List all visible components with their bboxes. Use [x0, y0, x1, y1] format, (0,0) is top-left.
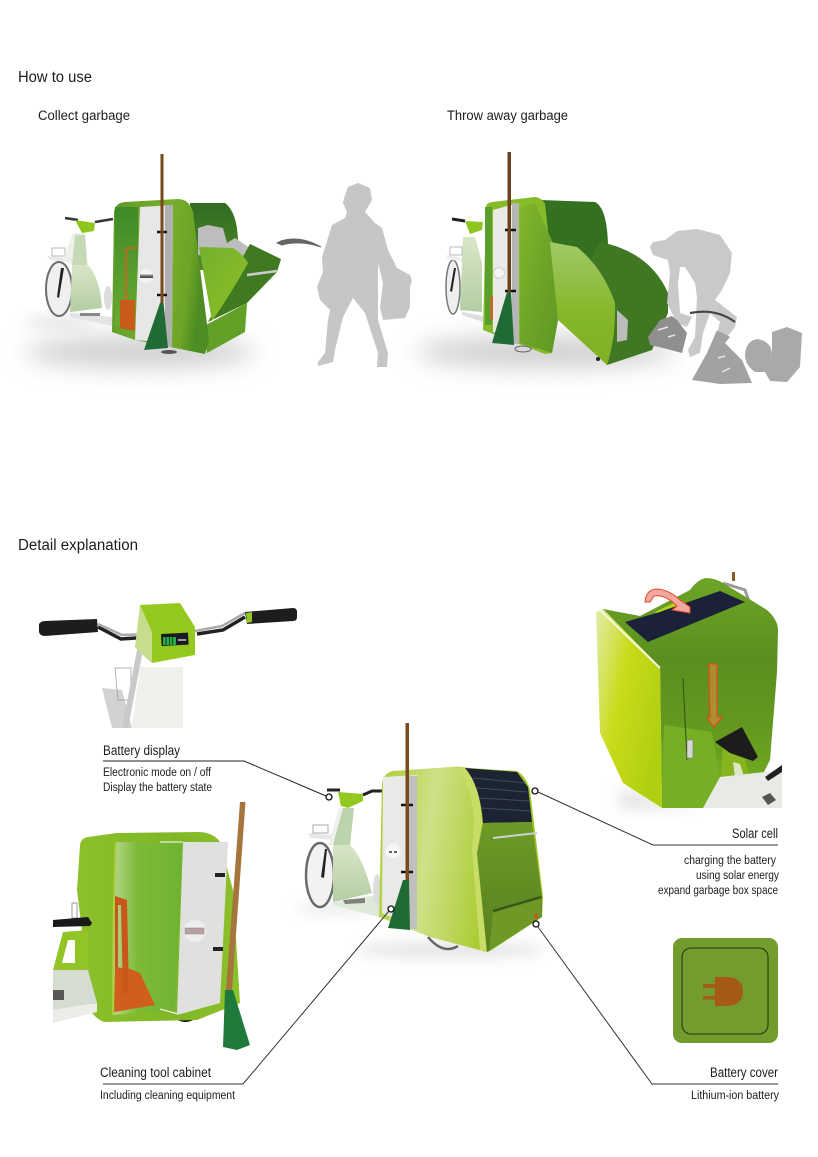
- icon: battery cover plug: [673, 938, 778, 1043]
- detail image: handlebar and battery display: [39, 603, 297, 728]
- callout: battery cover: Battery cover: [710, 1065, 778, 1080]
- heading: how to use: How to use: [18, 69, 92, 86]
- heading: detail explanation: Detail explanation: [18, 537, 138, 554]
- callout: battery display: Display the battery state: [103, 782, 212, 794]
- heading: throw away garbage: Throw away garbage: [447, 108, 568, 123]
- callout: battery display: [103, 743, 332, 800]
- callout: solar cell: Solar cell: [732, 826, 778, 841]
- callout: solar cell: charging the battery: [684, 855, 776, 867]
- heading: collect garbage: Collect garbage: [38, 108, 130, 123]
- callout: cleaning tool cabinet: Cleaning tool cabinet: [100, 1065, 211, 1080]
- callout: battery cover: Lithium-ion battery: [691, 1090, 779, 1102]
- callout: cleaning tool cabinet: [100, 906, 394, 1102]
- callout: battery cover: [533, 921, 779, 1102]
- illustration: throwing away garbage cart: [415, 152, 675, 368]
- garbage bags pile: [648, 316, 802, 384]
- callout: cleaning tool cabinet: Including cleaning equipment: [100, 1090, 236, 1102]
- silhouette: worker bending over: [650, 229, 737, 357]
- callout: solar cell: expand garbage box space: [658, 885, 778, 897]
- silhouette: worker carrying bags: [317, 183, 412, 367]
- callout: solar cell: [532, 788, 779, 897]
- main illustration: cart with bike: [295, 723, 545, 958]
- detail image: solar cell on top of cart: [596, 572, 782, 808]
- callout: battery display: Electronic mode on / off: [103, 767, 212, 779]
- arrow: bag lifted: [690, 312, 735, 322]
- callout: solar cell: using solar energy: [696, 870, 779, 882]
- arrow: bag thrown into cart: [277, 239, 321, 247]
- detail image: cleaning tool cabinet open: [53, 802, 250, 1050]
- illustration: collecting garbage cart: [24, 154, 281, 368]
- callout: battery display: Battery display: [103, 743, 180, 758]
